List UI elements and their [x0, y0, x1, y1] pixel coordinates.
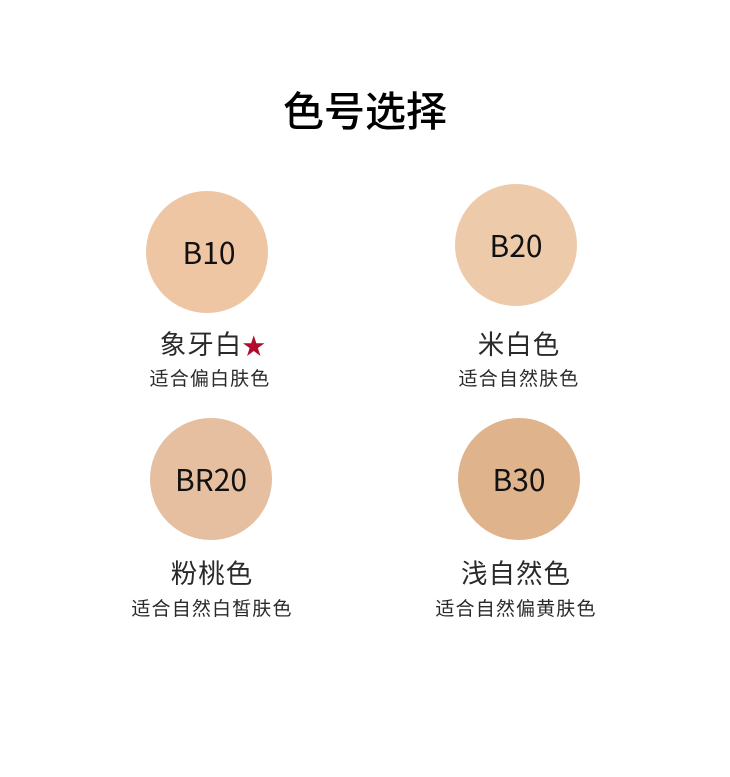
- shade name: 象牙白: 象牙白★: [160, 323, 266, 362]
- swatch: B10: B10: [182, 229, 236, 273]
- description: BR20: 适合自然白皙肤色: [131, 594, 293, 621]
- description: B30: 适合自然偏黄肤色: [435, 594, 597, 621]
- shade name: 浅自然色: 浅自然色: [461, 552, 571, 591]
- swatch: B20: B20: [489, 222, 542, 266]
- swatch: B30: [458, 418, 580, 540]
- shade name: 粉桃色: 粉桃色: [171, 552, 253, 591]
- title: 色号选择: [283, 78, 447, 138]
- shade name: 米白色: 米白色: [478, 323, 560, 362]
- description: B10: 适合偏白肤色: [150, 364, 270, 391]
- swatch: BR20: [150, 418, 272, 540]
- swatch: BR20: BR20: [175, 456, 247, 500]
- swatch: B30: B30: [492, 456, 546, 500]
- description: B20: 适合自然肤色: [459, 364, 579, 391]
- swatch: B20: [455, 184, 577, 306]
- swatch: B10: [146, 191, 268, 313]
